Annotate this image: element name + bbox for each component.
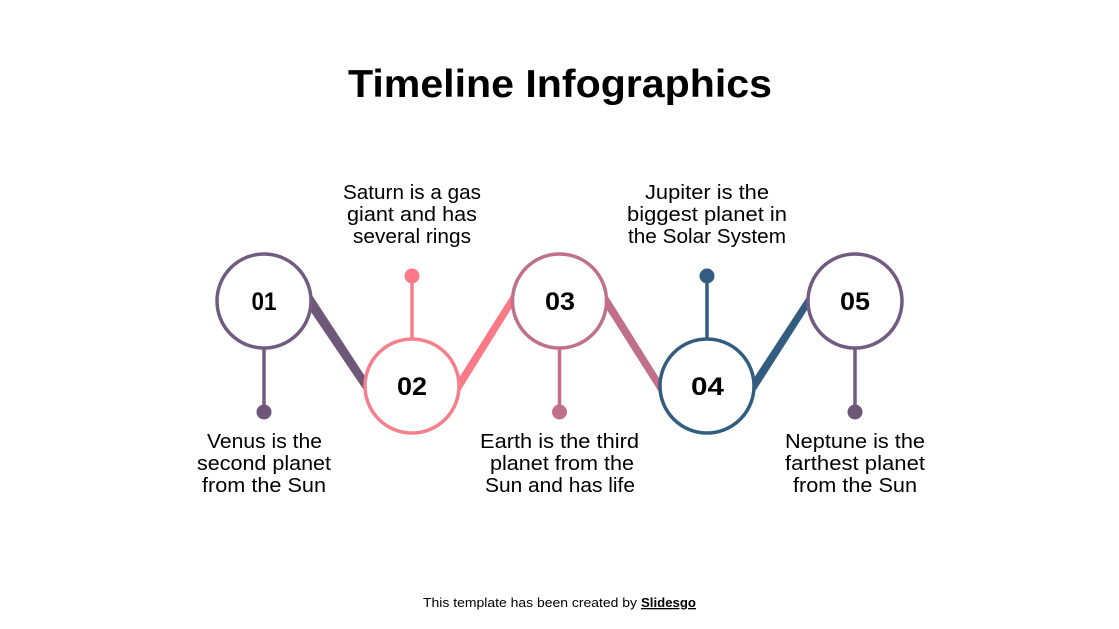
connector: 04 to 05 <box>748 288 813 402</box>
text: Jupiter: the Solar System <box>628 226 786 248</box>
stem and dot 03 <box>552 348 567 420</box>
number 05: 05 <box>840 288 870 316</box>
step 02 <box>343 182 481 433</box>
text: Neptune: farthest planet <box>785 453 925 475</box>
stem and dot 02 <box>404 268 420 340</box>
text: Earth: Sun and has life <box>485 475 635 497</box>
number 01: 01 <box>252 288 277 316</box>
step 05 <box>785 254 925 497</box>
circle 04 <box>660 339 754 433</box>
connector: 01 to 02 <box>306 286 372 402</box>
footer credit: Slidesgo <box>641 595 696 610</box>
stem and dot 05 <box>848 348 862 420</box>
stem and dot 04 <box>700 268 714 340</box>
text: Venus: second planet <box>197 453 331 475</box>
footer credit: This template has been created by <box>423 595 638 610</box>
connector: 02 to 03 <box>452 286 517 404</box>
text: Neptune <box>785 431 925 497</box>
text: Jupiter: biggest planet in <box>627 204 787 226</box>
text: Venus: Venus is the <box>207 431 322 453</box>
number 04: 04 <box>691 373 724 401</box>
number 03: 03 <box>545 288 575 316</box>
connector: 03 to 04 <box>601 285 665 402</box>
circle 05 <box>808 254 902 348</box>
stem and dot 01 <box>256 348 272 420</box>
step 04 <box>627 182 787 433</box>
number 02: 02 <box>397 373 427 401</box>
text: Earth <box>480 431 639 497</box>
text: Neptune: Neptune is the <box>785 431 925 453</box>
text: Neptune: from the Sun <box>793 475 917 497</box>
text: Saturn <box>343 182 481 248</box>
step 01 <box>197 254 331 497</box>
title: Timeline Infographics <box>348 63 772 106</box>
text: Earth: Earth is the third <box>480 431 639 453</box>
text: Venus: from the Sun <box>202 475 326 497</box>
circle 01 <box>217 254 311 348</box>
circle 02 <box>365 339 459 433</box>
text: Earth: planet from the <box>490 453 634 475</box>
text: Jupiter: Jupiter is the <box>645 182 769 204</box>
text: Jupiter <box>627 182 787 248</box>
text: Venus <box>197 431 331 497</box>
text: Saturn: several rings <box>353 226 471 248</box>
text: Saturn: giant and has <box>347 204 477 226</box>
circle 03 <box>512 254 606 348</box>
step 03 <box>480 254 639 497</box>
text: Saturn: Saturn is a gas <box>343 182 481 204</box>
